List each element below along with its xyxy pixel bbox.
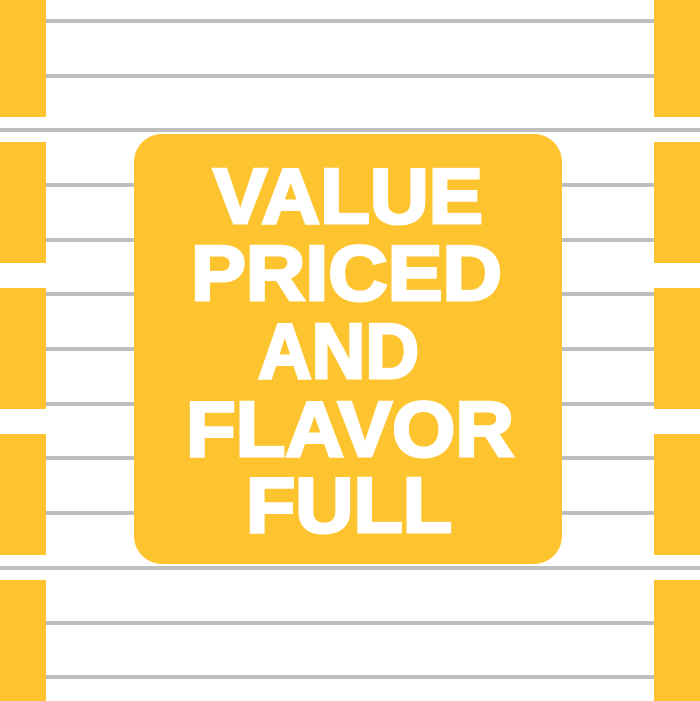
left yellow bars (0, 0, 46, 701)
badge text: VALUE (213, 152, 483, 240)
badge text (186, 152, 514, 549)
badge text: AND (258, 307, 419, 395)
badge text: PRICED (191, 229, 502, 317)
right yellow bars (654, 0, 700, 701)
badge text: FULL (246, 461, 452, 549)
central badge (134, 134, 562, 564)
badge text: FLAVOR (186, 385, 514, 473)
